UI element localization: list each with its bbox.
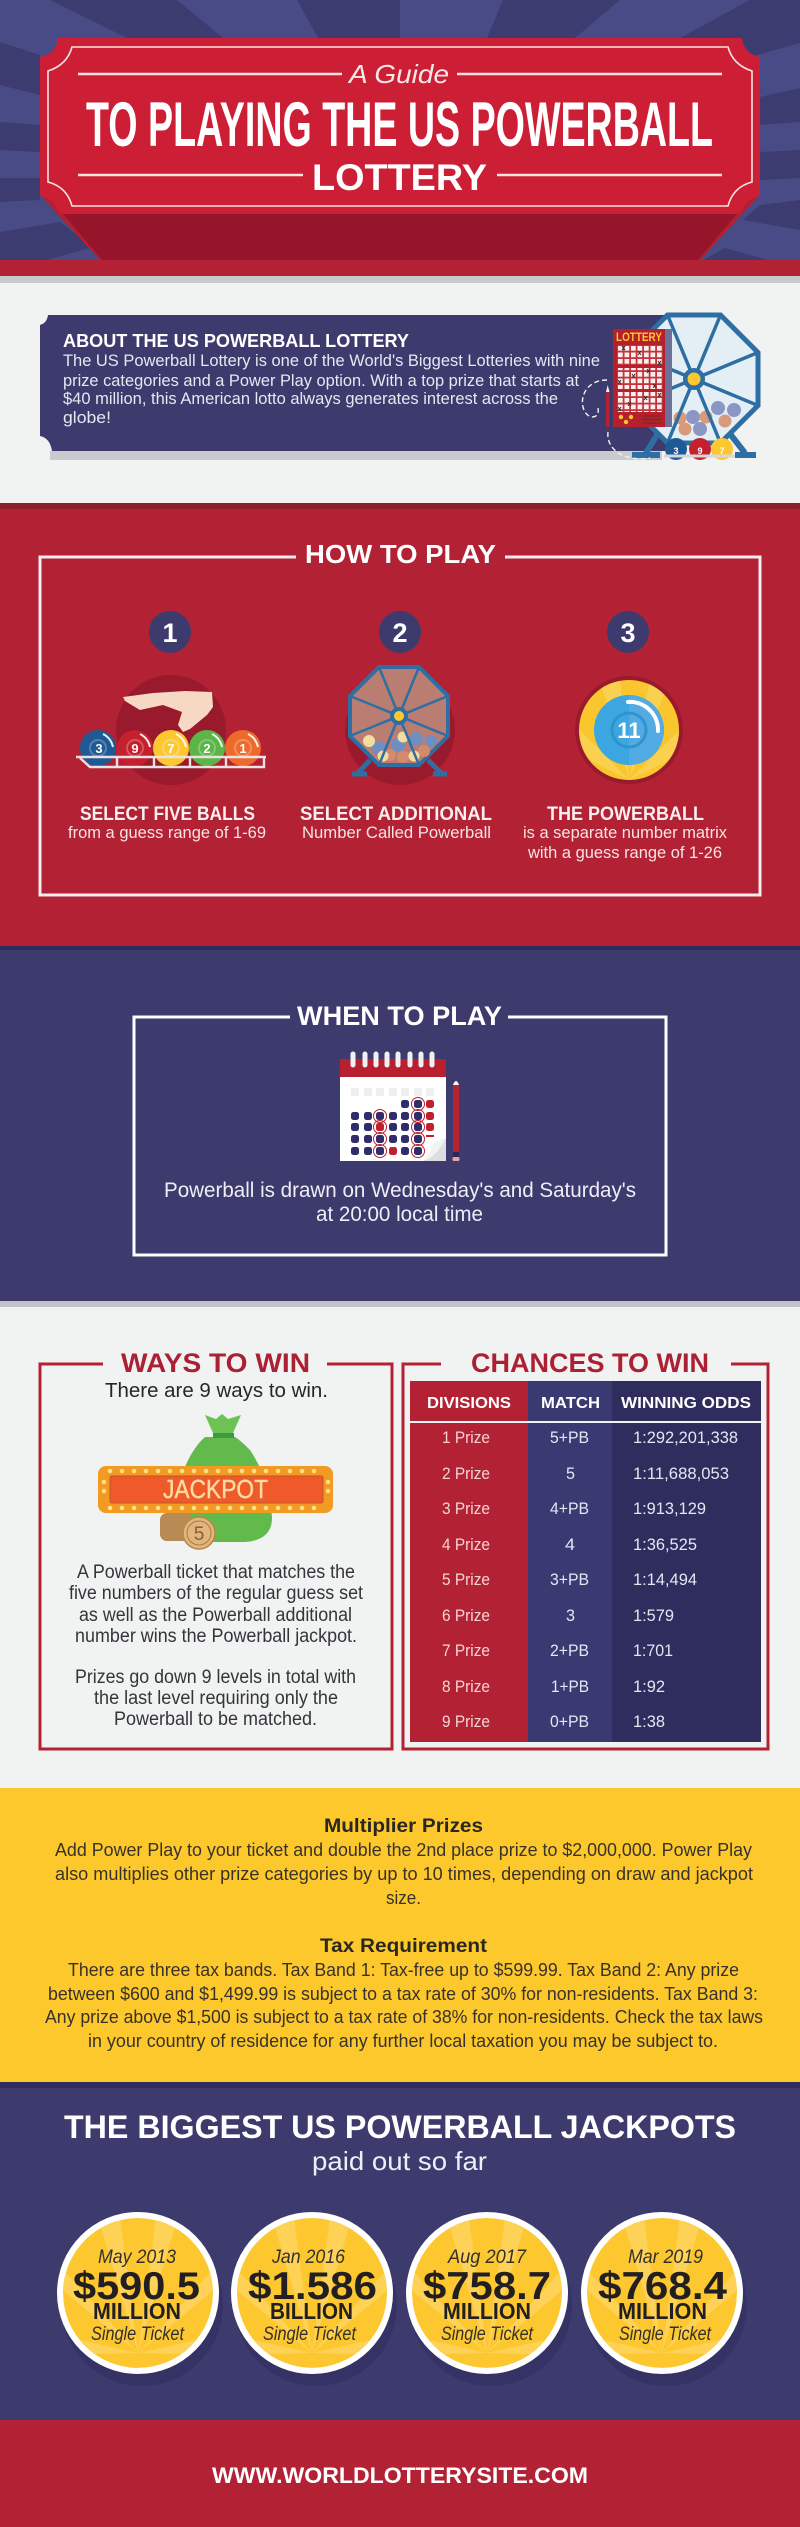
jackpot: Jan 2016: Jan 2016 xyxy=(271,2247,345,2268)
heading: multiplier prizes: Multiplier Prizes xyxy=(324,1816,483,1837)
when to play text: at 20:00 local time xyxy=(316,1203,483,1226)
icon: numbered balls: 3 xyxy=(673,446,679,456)
divisions column xyxy=(442,1428,490,1731)
heading: chances to win: CHANCES TO WIN xyxy=(471,1348,709,1378)
match column: 5+PB xyxy=(550,1428,589,1447)
odds column: 1:92 xyxy=(633,1677,665,1696)
icon: calendar xyxy=(340,1054,460,1161)
panel: ways to win xyxy=(0,1301,800,1788)
divisions column: 8 Prize xyxy=(442,1677,490,1696)
red band xyxy=(0,260,800,276)
sign xyxy=(40,38,760,214)
multiplier text: size. xyxy=(386,1888,421,1908)
step 3 text: is a separate number matrix xyxy=(523,823,727,842)
step 2 text: SELECT ADDITIONAL xyxy=(300,804,492,825)
jackpot: Mar 2019: Single Ticket xyxy=(619,2324,712,2345)
heading: when to play: WHEN TO PLAY xyxy=(297,1001,502,1031)
table header: MATCH xyxy=(541,1395,600,1412)
step 2 text: Number Called Powerball xyxy=(302,823,491,842)
multiplier text: Add Power Play to your ticket and double the 2nd place prize to $2,000,000. Power Play xyxy=(55,1840,752,1860)
ticket heading: LOTTERY xyxy=(616,330,662,344)
icon: numbered balls xyxy=(664,438,735,460)
heading: how to play: HOW TO PLAY xyxy=(305,539,496,569)
divisions column: 9 Prize xyxy=(442,1712,490,1731)
icon: hand selecting balls xyxy=(76,675,266,785)
footer url: WWW.WORLDLOTTERYSITE.COM xyxy=(212,2463,588,2488)
title: a guide: A Guide xyxy=(347,59,449,89)
about text: The US Powerball Lottery is one of the World's Biggest Lotteries with nine xyxy=(63,351,600,370)
odds column xyxy=(633,1428,738,1731)
icon: hand selecting balls: 3 xyxy=(95,741,103,756)
step 3 text xyxy=(523,804,727,862)
step 2 text xyxy=(300,804,492,842)
icon: lottery ticket xyxy=(613,329,672,427)
icon: money bag with jackpot sign: 5 xyxy=(194,1524,204,1545)
jackpot: Mar 2019: Mar 2019 xyxy=(628,2247,703,2268)
tax text: There are three tax bands. Tax Band 1: Tax-free up to $599.99. Tax Band 2: Any prize xyxy=(68,1960,739,1980)
match column: 3 xyxy=(566,1606,575,1625)
divisions column: 1 Prize xyxy=(442,1428,490,1447)
ways to win text: Prizes go down 9 levels in total with xyxy=(75,1667,356,1688)
step 3 number: 3 xyxy=(620,618,636,648)
tax text: between $600 and $1,499.99 is subject to a tax rate of 30% for non-residents. Tax Band 3: xyxy=(48,1984,758,2004)
about text: globe! xyxy=(63,408,111,427)
jackpot: Jan 2016: BILLION xyxy=(270,2298,353,2324)
match column xyxy=(550,1428,589,1731)
panel: how to play xyxy=(0,503,800,946)
match column: 2+PB xyxy=(550,1641,589,1660)
tax text xyxy=(45,1960,763,2051)
jackpot: Mar 2019: MILLION xyxy=(618,2298,707,2324)
odds column: 1:701 xyxy=(633,1641,673,1660)
heading: tax requirement: Tax Requirement xyxy=(320,1936,488,1957)
jackpot: May 2013: $590.5 xyxy=(73,2265,200,2308)
divisions column: 7 Prize xyxy=(442,1641,490,1660)
panel: when to play xyxy=(0,946,800,1301)
about text xyxy=(63,351,600,427)
icon: numbered balls: 9 xyxy=(697,446,703,456)
panel: chances to win xyxy=(403,1348,768,1749)
jackpot: Jan 2016 xyxy=(231,2212,397,2386)
table header xyxy=(427,1395,751,1412)
ways to win text: the last level requiring only the xyxy=(94,1688,338,1709)
divisions column: 4 Prize xyxy=(442,1535,490,1554)
table header: WINNING ODDS xyxy=(621,1395,751,1412)
about text: prize categories and a Power Play option. With a top prize that starts at xyxy=(63,371,579,390)
step 1 text xyxy=(68,804,266,842)
jackpot: Mar 2019 xyxy=(581,2212,747,2386)
step 2 number: 2 xyxy=(392,618,408,648)
jackpot: May 2013: Single Ticket xyxy=(91,2324,185,2345)
divisions column: 3 Prize xyxy=(442,1499,490,1518)
ways to win text: Powerball to be matched. xyxy=(114,1709,317,1730)
table: odds xyxy=(410,1381,761,1742)
table header: DIVISIONS xyxy=(427,1395,511,1412)
jackpot: Aug 2017 xyxy=(406,2212,572,2386)
icon: hand selecting balls: 1 xyxy=(239,741,247,756)
match column: 0+PB xyxy=(550,1712,589,1731)
jackpot: Jan 2016: Single Ticket xyxy=(263,2324,357,2345)
panel: header xyxy=(0,0,800,283)
tax text: Any prize above $1,500 is subject to a tax rate of 38% for non-residents. Check the tax laws xyxy=(45,2007,763,2027)
when to play text xyxy=(164,1179,636,1226)
ways to win text xyxy=(69,1562,364,1730)
about heading: ABOUT THE US POWERBALL LOTTERY xyxy=(63,331,409,351)
panel: multiplier and tax xyxy=(0,1788,800,2082)
ways to win text: five numbers of the regular guess set xyxy=(69,1583,364,1604)
heading: ways to win: WAYS TO WIN xyxy=(121,1348,310,1378)
step 1 number xyxy=(149,611,191,653)
jackpot: Aug 2017: $758.7 xyxy=(423,2265,551,2308)
panel: biggest jackpots xyxy=(0,2082,800,2420)
jackpots subtitle: paid out so far xyxy=(312,2146,487,2176)
multiplier text xyxy=(55,1840,753,1908)
jackpot: Aug 2017: Aug 2017 xyxy=(447,2247,527,2268)
sign shadow xyxy=(42,197,758,260)
step 3 text: THE POWERBALL xyxy=(547,804,704,825)
match column: 4+PB xyxy=(550,1499,589,1518)
divisions column: 6 Prize xyxy=(442,1606,490,1625)
icon: lottery wheel drum xyxy=(345,667,455,785)
ways to win text: as well as the Powerball additional xyxy=(79,1605,352,1626)
match column: 5 xyxy=(566,1464,575,1483)
jackpot: Jan 2016: $1.586 xyxy=(248,2265,377,2308)
icon: powerball: 11 xyxy=(617,718,641,743)
step 1 text: SELECT FIVE BALLS xyxy=(80,804,255,825)
odds column: 1:38 xyxy=(633,1712,665,1731)
match column: 3+PB xyxy=(550,1570,589,1589)
step 3 text: with a guess range of 1-26 xyxy=(527,843,722,862)
icon: hand selecting balls: 2 xyxy=(203,741,211,756)
step 3 number xyxy=(607,611,649,653)
jackpot: Aug 2017: MILLION xyxy=(443,2298,531,2324)
tax text: in your country of residence for any further local taxation you may be subject to. xyxy=(88,2031,718,2051)
divisions column: 2 Prize xyxy=(442,1464,490,1483)
icon: money bag with jackpot sign xyxy=(98,1414,333,1549)
odds column: 1:292,201,338 xyxy=(633,1428,738,1447)
when to play text: Powerball is drawn on Wednesday's and Saturday's xyxy=(164,1179,636,1202)
step 1 number: 1 xyxy=(162,618,178,648)
jackpot: May 2013: May 2013 xyxy=(98,2247,176,2268)
odds column: 1:11,688,053 xyxy=(633,1464,729,1483)
ways to win text: number wins the Powerball jackpot. xyxy=(75,1626,357,1647)
title: lottery: LOTTERY xyxy=(312,157,487,198)
icon: numbered balls: 7 xyxy=(719,446,725,456)
jackpot: Aug 2017: Single Ticket xyxy=(441,2324,534,2345)
odds column: 1:14,494 xyxy=(633,1570,697,1589)
icon: hand selecting balls: 9 xyxy=(131,741,139,756)
multiplier text: also multiplies other prize categories by up to 10 times, depending on draw and jackpot xyxy=(55,1864,753,1884)
about text: $40 million, this American lotto always generates interest across the xyxy=(63,389,558,408)
odds column: 1:36,525 xyxy=(633,1535,697,1554)
divisions column: 5 Prize xyxy=(442,1570,490,1589)
jackpot: Mar 2019: $768.4 xyxy=(598,2265,727,2308)
icon: lottery wheel xyxy=(630,315,758,455)
jackpot: May 2013: MILLION xyxy=(93,2298,181,2324)
odds column: 1:913,129 xyxy=(633,1499,706,1518)
jackpot label: JACKPOT xyxy=(163,1474,268,1504)
step 1 text: from a guess range of 1-69 xyxy=(68,823,266,842)
icon: powerball xyxy=(570,676,690,784)
odds column: 1:579 xyxy=(633,1606,674,1625)
step 2 number xyxy=(379,611,421,653)
jackpot: May 2013 xyxy=(57,2212,223,2386)
ways to win text: A Powerball ticket that matches the xyxy=(77,1562,355,1583)
icon: hand selecting balls: 7 xyxy=(167,741,175,756)
ways subtitle: There are 9 ways to win. xyxy=(105,1380,328,1402)
panel: footer xyxy=(0,2420,800,2527)
heading: biggest jackpots: THE BIGGEST US POWERBALL JACKPOTS xyxy=(64,2109,736,2145)
icon: pencil and dashed path xyxy=(582,380,650,459)
match column: 1+PB xyxy=(551,1677,589,1696)
match column: 4 xyxy=(565,1535,575,1554)
panel: about xyxy=(0,283,800,503)
